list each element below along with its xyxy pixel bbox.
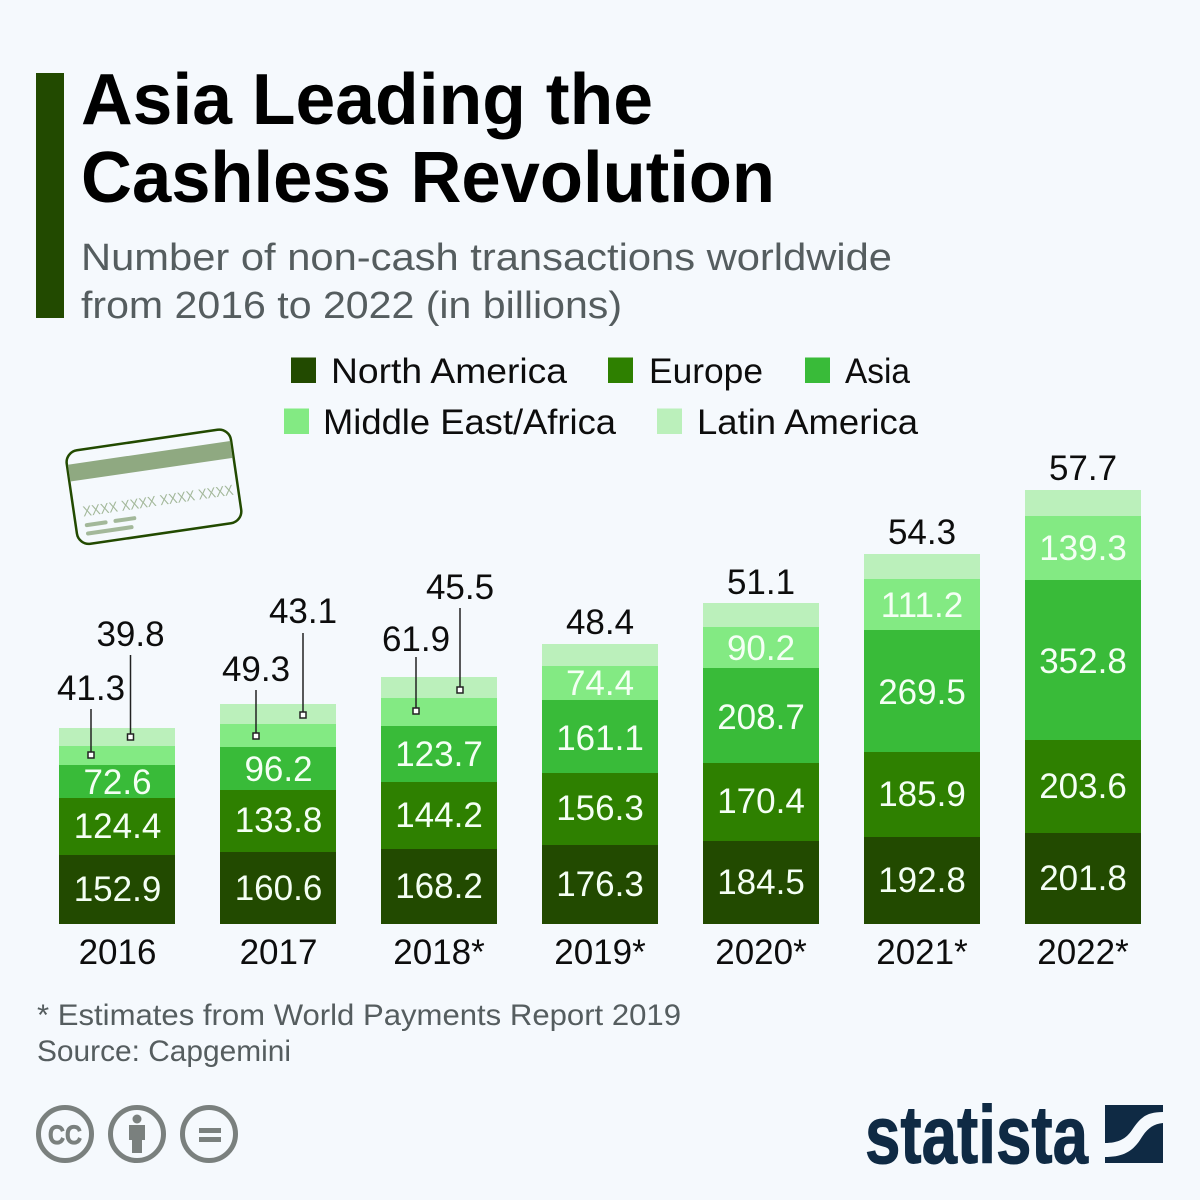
title: Asia Leading the xyxy=(81,60,653,140)
bar: 2016: 39.8 xyxy=(96,615,165,654)
title: Cashless Revolution xyxy=(81,138,775,218)
footnote and source: * Estimates from World Payments Report 2019 xyxy=(37,999,681,1032)
icon: no derivatives xyxy=(182,1108,236,1160)
bar: 2021: 54.3 xyxy=(888,513,956,552)
x axis labels: 2021* xyxy=(876,933,968,972)
legend: Middle East/Africa xyxy=(323,403,617,442)
subtitle: from 2016 to 2022 (in billions) xyxy=(81,285,622,327)
statista logo: statista xyxy=(865,1090,1089,1181)
legend xyxy=(284,352,919,442)
bar: 2019 xyxy=(542,603,658,924)
x axis labels xyxy=(79,933,1129,972)
bar: 2022: 139.3 xyxy=(1039,529,1127,568)
icon: attribution xyxy=(110,1108,164,1160)
bar: 2020 xyxy=(703,563,819,924)
bar: 2016: 152.9 xyxy=(74,870,161,909)
bar: 2017: 160.6 xyxy=(235,869,322,908)
bar: 2018: 123.7 xyxy=(395,735,483,774)
bar: 2017: 96.2 xyxy=(244,750,313,789)
icon: credit card xyxy=(65,428,243,545)
icon: creative commons xyxy=(38,1108,92,1160)
bar: 2018 xyxy=(381,568,497,924)
bar: 2016 xyxy=(57,615,175,924)
bar: 2022: 203.6 xyxy=(1039,767,1127,806)
bar: 2022: 352.8 xyxy=(1039,642,1127,681)
bar: 2019: 74.4 xyxy=(566,664,634,703)
bar: 2019: 48.4 xyxy=(566,603,634,642)
bar: 2022 xyxy=(1025,449,1141,924)
bar: 2017 xyxy=(220,592,337,924)
bar: 2019: 176.3 xyxy=(556,865,644,904)
x axis labels: 2020* xyxy=(715,933,807,972)
bar: 2016: 41.3 xyxy=(57,669,125,708)
title accent bar xyxy=(36,73,64,318)
x axis labels: 2017 xyxy=(240,933,317,972)
bar: 2017: 43.1 xyxy=(269,592,337,631)
bar: 2020: 90.2 xyxy=(727,629,795,668)
footnote and source xyxy=(37,999,681,1068)
footnote and source: Source: Capgemini xyxy=(37,1035,291,1068)
bar: 2021 xyxy=(864,513,980,924)
subtitle xyxy=(81,237,892,327)
legend: Asia xyxy=(845,352,911,391)
bar: 2018: 61.9 xyxy=(382,620,450,659)
bar: 2016: 124.4 xyxy=(74,807,161,846)
bar: 2019: 161.1 xyxy=(556,719,644,758)
icon: creative commons: CC xyxy=(48,1120,82,1150)
x axis labels: 2022* xyxy=(1037,933,1129,972)
bar: 2017: 133.8 xyxy=(235,801,322,840)
bar: 2020: 208.7 xyxy=(717,698,805,737)
bar: 2022: 201.8 xyxy=(1039,859,1127,898)
x axis labels: 2018* xyxy=(393,933,485,972)
bar: 2021: 269.5 xyxy=(878,673,966,712)
subtitle: Number of non-cash transactions worldwide xyxy=(81,237,892,279)
bar: 2018: 144.2 xyxy=(395,796,483,835)
bar: 2019: 156.3 xyxy=(556,789,644,828)
legend: Europe xyxy=(649,352,763,391)
legend: Latin America xyxy=(697,403,919,442)
bar: 2020: 184.5 xyxy=(717,863,805,902)
bar: 2017: 49.3 xyxy=(222,650,290,689)
bar: 2021: 111.2 xyxy=(881,586,963,625)
bar: 2020: 51.1 xyxy=(727,563,795,602)
bar: 2021: 192.8 xyxy=(878,861,966,900)
title xyxy=(81,60,775,218)
bar: 2018: 168.2 xyxy=(395,867,483,906)
bar: 2016: 72.6 xyxy=(83,763,152,802)
icon: credit card: XXXX XXXX XXXX XXXX xyxy=(82,483,235,520)
bar: 2020: 170.4 xyxy=(717,782,805,821)
x axis labels: 2016 xyxy=(79,933,156,972)
legend: North America xyxy=(331,352,568,391)
bar: 2018: 45.5 xyxy=(426,568,494,607)
x axis labels: 2019* xyxy=(554,933,646,972)
bar: 2021: 185.9 xyxy=(878,775,966,814)
bar: 2022: 57.7 xyxy=(1049,449,1117,488)
